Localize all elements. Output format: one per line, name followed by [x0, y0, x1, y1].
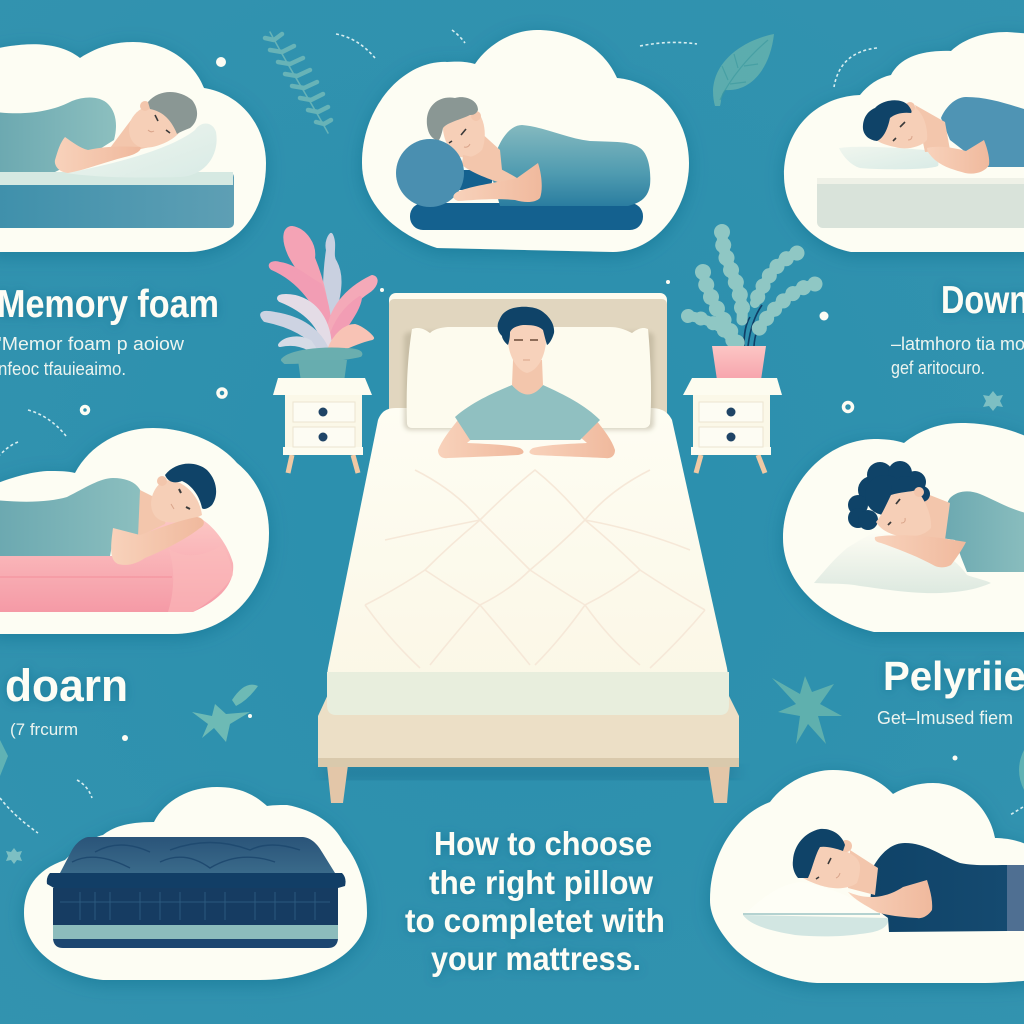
sleeper: [793, 829, 1024, 932]
decoration: ring dots and small flowers: [0, 57, 1024, 864]
heading: title: to completet with: [405, 902, 665, 939]
pillow base: [410, 203, 643, 230]
pillow: [743, 882, 889, 936]
sleeper: [438, 307, 615, 458]
text: memory foam description: [0, 334, 185, 379]
pillow: [814, 533, 991, 593]
heading: title: [405, 825, 665, 977]
icon: teal flower left: [192, 685, 258, 742]
text: down description: –latmhoro tia mo: [891, 334, 1024, 354]
heading: doarn: doarn: [5, 660, 128, 711]
heading: memory foam: Memory foam: [0, 283, 219, 326]
heading: title: your mattress.: [431, 940, 641, 977]
plant: top right leaf: [713, 34, 774, 106]
mattress: [327, 408, 729, 715]
sleeper: [848, 461, 1024, 572]
text: memory foam description: nfeoc tfauieaimo.: [0, 359, 126, 379]
text: down description: gef aritocuro.: [891, 358, 985, 378]
bed base: [318, 690, 739, 767]
sleeper: [0, 92, 197, 173]
heading: title: the right pillow: [429, 864, 653, 901]
mattress: [0, 172, 234, 228]
panel: down sleeper cloud: [784, 32, 1024, 252]
mattress: [817, 178, 1024, 228]
right nightstand: [683, 378, 782, 473]
panel: bottom mattress cloud: [24, 787, 367, 980]
left plant: [262, 228, 376, 390]
icon: small flowers: [6, 391, 1003, 864]
headboard: [389, 293, 667, 423]
pillows: [404, 327, 654, 430]
panel: memory foam sleeper cloud: [0, 42, 266, 252]
pillow: [66, 124, 217, 178]
heading: title: How to choose: [434, 825, 652, 862]
text: memory foam description: 'Memor foam p aoiow: [0, 334, 185, 354]
pink pillow bed: [0, 520, 233, 612]
text: doarn description: (7 frcurm: [10, 720, 78, 739]
dark mattress: [47, 837, 346, 948]
decoration: dashed arcs: [0, 30, 1023, 833]
legs: [327, 765, 730, 803]
icon: teal flower right: [772, 676, 842, 744]
right plant: [688, 232, 815, 389]
panel: polyester sleeper cloud: [783, 423, 1024, 632]
text: polyester description: Get–Imused fiem: [877, 708, 1013, 728]
text: down description: [891, 334, 1024, 378]
panel: doarn sleeper cloud: [0, 428, 269, 634]
panel: side sleeper with bolster cloud: [362, 30, 689, 252]
sleeper: [0, 464, 216, 565]
plant: top left fern: [265, 32, 331, 133]
central bed: [318, 293, 739, 803]
sleeper with bolster: [396, 97, 650, 207]
panel: back sleeper cloud: [710, 770, 1024, 983]
left nightstand: [273, 378, 372, 473]
sleeper: [863, 97, 1024, 174]
pillow: [839, 147, 938, 169]
